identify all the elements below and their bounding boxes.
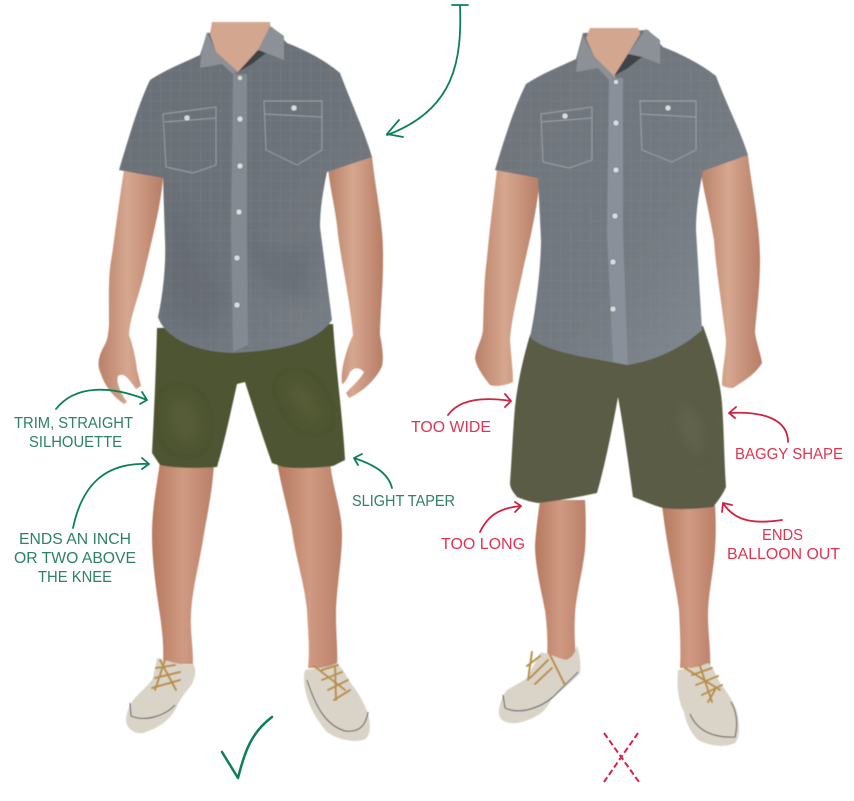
callout: ends an inch or two above the knee <box>14 458 149 586</box>
shorts shading <box>180 413 189 429</box>
left leg <box>535 500 586 660</box>
arrow <box>480 502 521 532</box>
placket <box>607 78 628 365</box>
label: TRIM, STRAIGHT <box>14 415 134 432</box>
icon: red dashed cross <box>604 733 639 782</box>
collar <box>200 26 284 74</box>
right shoe <box>677 663 739 746</box>
callout: slight taper <box>352 454 455 510</box>
left shoe <box>499 645 580 723</box>
label: TOO WIDE <box>411 419 491 436</box>
collar shadow <box>238 50 266 72</box>
icon: green check mark <box>222 717 272 778</box>
callout: baggy shape <box>729 407 843 463</box>
figure: wrong fit shorts <box>475 28 762 746</box>
label: THE KNEE <box>38 569 112 586</box>
arrow <box>354 454 392 488</box>
shirt buttons <box>562 79 671 312</box>
label: ENDS AN INCH <box>19 531 131 548</box>
neck <box>210 22 271 72</box>
label: BAGGY SHAPE <box>735 446 843 463</box>
label: OR TWO ABOVE <box>14 550 136 567</box>
arrow <box>73 458 149 528</box>
arrow: top pointer to shirt <box>387 5 468 137</box>
right arm and hand <box>700 155 762 388</box>
neck <box>586 28 640 78</box>
shirt weave <box>119 27 372 353</box>
pockets <box>541 101 696 168</box>
callout: ends balloon out <box>722 503 841 563</box>
left leg <box>152 462 214 664</box>
callout: too wide <box>411 394 511 436</box>
shirt buttons <box>184 75 297 308</box>
arrow <box>56 390 147 409</box>
arrow <box>729 407 788 442</box>
label: ENDS <box>762 527 803 544</box>
callout: trim, straight silhouette <box>14 390 147 451</box>
shirt <box>119 27 372 353</box>
arrow <box>448 394 511 415</box>
collar <box>576 29 660 80</box>
label: SILHOUETTE <box>29 434 122 451</box>
label: BALLOON OUT <box>727 546 841 563</box>
shirt <box>495 30 748 365</box>
right arm and hand <box>328 156 383 398</box>
right shoe <box>304 663 370 741</box>
arrow <box>722 503 782 522</box>
collar shadow <box>614 54 642 76</box>
left shoe <box>126 658 195 733</box>
shorts shading <box>680 405 701 455</box>
left arm and hand <box>475 170 540 386</box>
callout: too long <box>441 502 525 553</box>
label: TOO LONG <box>441 536 525 553</box>
placket <box>231 74 248 352</box>
label: SLIGHT TAPER <box>352 493 455 510</box>
left arm and hand <box>99 170 163 404</box>
figure: correct fit shorts <box>99 22 383 741</box>
right leg <box>662 505 716 668</box>
shorts <box>152 324 345 468</box>
shirt weave <box>495 30 748 365</box>
right leg <box>277 462 342 668</box>
shirt shadow <box>190 260 304 312</box>
shorts <box>510 326 726 509</box>
pockets <box>163 101 322 173</box>
